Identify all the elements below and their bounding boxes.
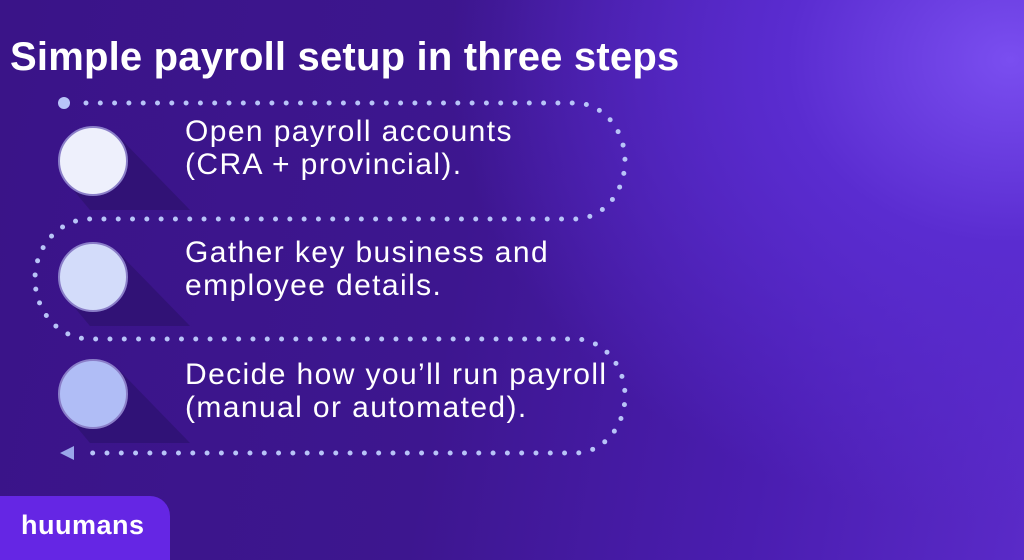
step 3 text: (manual or automated).: [185, 391, 528, 424]
step 3 text: Decide how you’ll run payroll: [185, 358, 607, 391]
logo badge: [0, 496, 170, 560]
icon: arrow head: [60, 446, 74, 460]
step 1 text: Open payroll accounts: [185, 115, 513, 148]
step markers: [59, 127, 127, 428]
step 2 text: Gather key business and: [185, 236, 549, 269]
step 3 text: [185, 358, 607, 424]
title: Simple payroll setup in three steps: [10, 35, 679, 79]
step 1 text: (CRA + provincial).: [185, 148, 463, 181]
step 2 text: employee details.: [185, 269, 442, 302]
step 2 text: [185, 236, 549, 302]
logo text: huumans: [21, 510, 145, 540]
step 1 text: [185, 115, 513, 181]
circle shadows: [70, 138, 190, 443]
